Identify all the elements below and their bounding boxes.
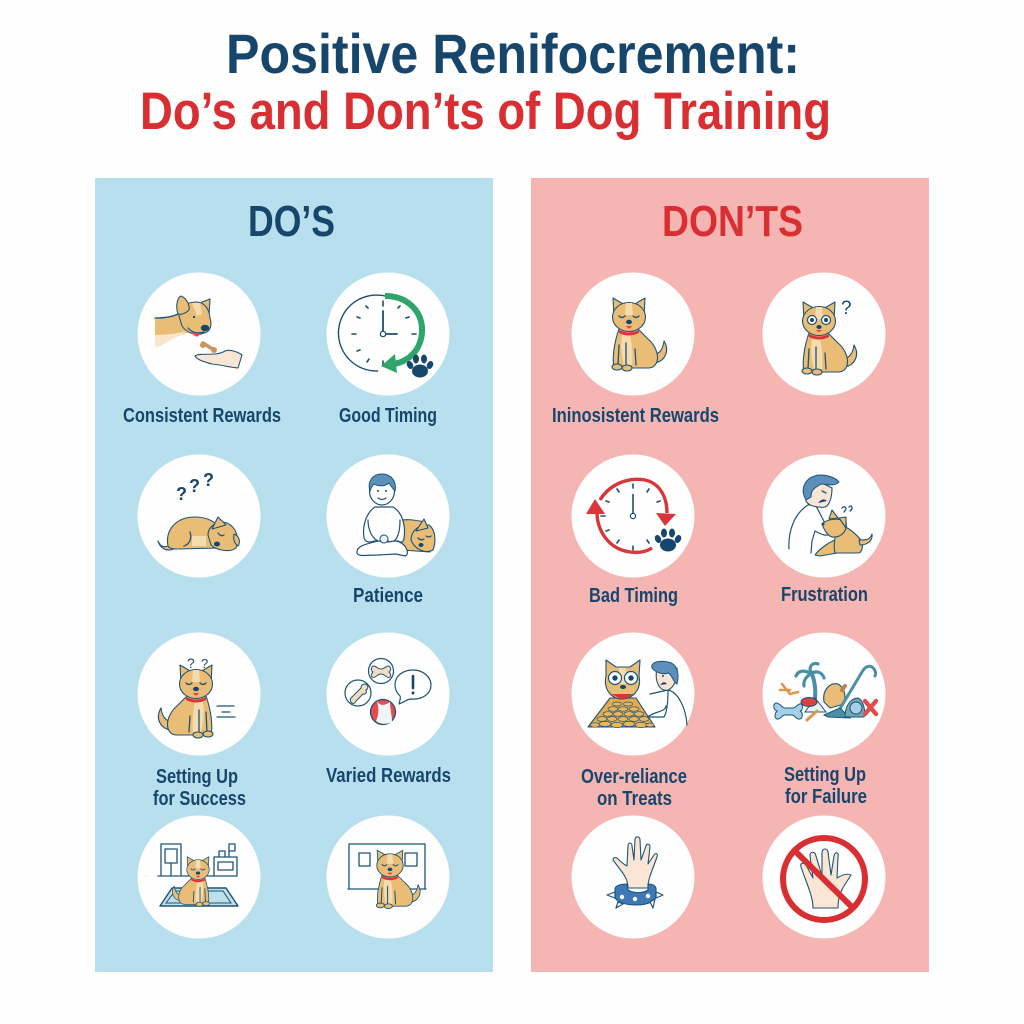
item: sleeping dog bbox=[138, 454, 260, 578]
label bbox=[784, 764, 867, 808]
item: setting up for success dog: ? bbox=[187, 655, 195, 671]
item: varied rewards bbox=[326, 632, 450, 756]
panel: do's bbox=[95, 178, 493, 972]
item: confused dog: ? bbox=[841, 298, 852, 319]
label bbox=[153, 766, 246, 810]
title: Do’s and Don’ts of Dog Training bbox=[140, 82, 831, 141]
label: Varied Rewards bbox=[326, 765, 451, 787]
item: setting up for failure clutter bbox=[762, 632, 886, 756]
label: Bad Timing bbox=[589, 585, 678, 607]
label: Good Timing bbox=[339, 405, 437, 427]
item: confused dog bbox=[762, 272, 886, 396]
item: frustration bbox=[762, 454, 886, 578]
item: no hitting bbox=[762, 816, 886, 938]
item: sleeping dog: ? bbox=[176, 484, 187, 504]
item: bad timing bbox=[572, 454, 694, 578]
panel: don'ts bbox=[531, 178, 929, 972]
label bbox=[581, 766, 687, 810]
label: Setting Up bbox=[156, 766, 238, 788]
label: Over-reliance bbox=[581, 766, 687, 788]
item: good timing bbox=[326, 272, 450, 396]
label: Frustration bbox=[781, 584, 868, 606]
label: Ininosistent Rewards bbox=[552, 405, 719, 427]
item: sleeping dog: ? bbox=[203, 470, 214, 490]
item: over-reliance on treats bbox=[572, 632, 694, 756]
item: dog on mat bbox=[138, 816, 260, 938]
label: Setting Up bbox=[784, 764, 866, 786]
item: setting up for success dog bbox=[138, 632, 260, 756]
label: Patience bbox=[353, 585, 423, 607]
item: consistent rewards bbox=[138, 272, 260, 396]
label: Consistent Rewards bbox=[123, 405, 281, 427]
heading: don'ts: DON’TS bbox=[662, 197, 803, 246]
title bbox=[140, 22, 831, 141]
label: for Failure bbox=[785, 786, 867, 808]
item: inconsistent rewards dog bbox=[572, 272, 694, 396]
label: for Success bbox=[153, 788, 246, 810]
label: on Treats bbox=[597, 788, 672, 810]
item: dog by wall bbox=[326, 816, 450, 938]
item: sleeping dog: ? bbox=[189, 476, 200, 496]
item: patience bbox=[326, 454, 450, 578]
item: setting up for success dog: ? bbox=[201, 656, 208, 671]
item: hand in spiked collar bbox=[572, 816, 694, 938]
title: Positive Renifocrement: bbox=[226, 22, 800, 85]
heading: do's: DO’S bbox=[248, 197, 335, 246]
